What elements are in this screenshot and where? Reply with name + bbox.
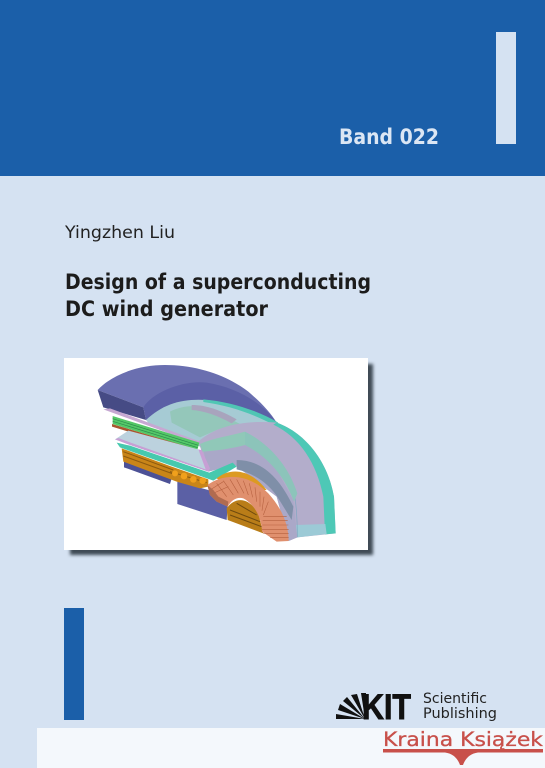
teal layer straight section bbox=[200, 432, 245, 452]
logo fan mark bbox=[336, 693, 366, 719]
book title: Design of a superconducting bbox=[65, 270, 371, 294]
inner winding lines bbox=[230, 503, 262, 527]
teal layer under plate bbox=[117, 443, 237, 481]
book title bbox=[65, 270, 371, 321]
lower-left blue accent bar bbox=[64, 608, 84, 720]
publisher name: Publishing bbox=[423, 706, 497, 722]
publisher name: Scientific bbox=[423, 691, 487, 707]
generator 3D cutaway illustration bbox=[98, 365, 336, 542]
copper coil arch bbox=[207, 477, 289, 542]
inner orange windings bbox=[227, 500, 263, 533]
inner curved teal layer bbox=[245, 432, 297, 502]
top blue header band bbox=[0, 0, 545, 176]
green winding stack bbox=[113, 416, 199, 450]
outer magnet yoke top surface bbox=[98, 365, 277, 423]
lower blue flange bbox=[124, 460, 172, 484]
logo letters: KIT bbox=[362, 688, 411, 727]
rear shell lilac stripe bbox=[192, 405, 237, 423]
shell end cap bbox=[296, 524, 327, 537]
rear translucent shell bbox=[146, 400, 277, 447]
book title: DC wind generator bbox=[65, 297, 269, 321]
knobbly orange coil ends bbox=[172, 470, 206, 484]
red-brown lower edge of winding bbox=[112, 424, 197, 451]
middle translucent plate bbox=[115, 431, 208, 472]
green winding lines bbox=[113, 419, 198, 448]
rear shell inner green shading bbox=[170, 406, 240, 437]
inner shaded arc bbox=[237, 460, 293, 520]
image white panel bbox=[64, 358, 368, 550]
copper coil segment lines bbox=[210, 479, 289, 537]
inner end wall line bbox=[290, 477, 297, 537]
series label: Band 022: Band 022 bbox=[339, 125, 439, 149]
header accent bar bbox=[496, 32, 516, 144]
orange arc behind copper bbox=[217, 471, 267, 490]
bookseller watermark bbox=[383, 728, 544, 765]
yoke inner curved face bbox=[143, 382, 277, 423]
publisher name bbox=[423, 691, 497, 722]
lower orange coil block bbox=[122, 448, 208, 488]
KIT Scientific Publishing logo bbox=[336, 688, 497, 727]
watermark text: Kraina Książek bbox=[383, 728, 544, 751]
yoke front face bbox=[98, 390, 146, 420]
orange coil lines bbox=[123, 452, 207, 483]
bottom white strip bbox=[37, 728, 545, 768]
copper coil lower shade bbox=[207, 485, 228, 507]
main translucent lilac shell bbox=[198, 422, 336, 541]
lower inner lilac region bbox=[203, 440, 297, 541]
image drop shadow bbox=[70, 364, 373, 555]
middle plate lilac edge bbox=[115, 438, 210, 472]
rear teal rim bbox=[203, 399, 278, 425]
author name: Yingzhen Liu bbox=[64, 223, 175, 243]
watermark book mark bbox=[383, 749, 543, 765]
upper lilac plate bbox=[103, 408, 200, 444]
blue support block bbox=[177, 482, 228, 520]
outer teal shell band bbox=[273, 423, 336, 534]
